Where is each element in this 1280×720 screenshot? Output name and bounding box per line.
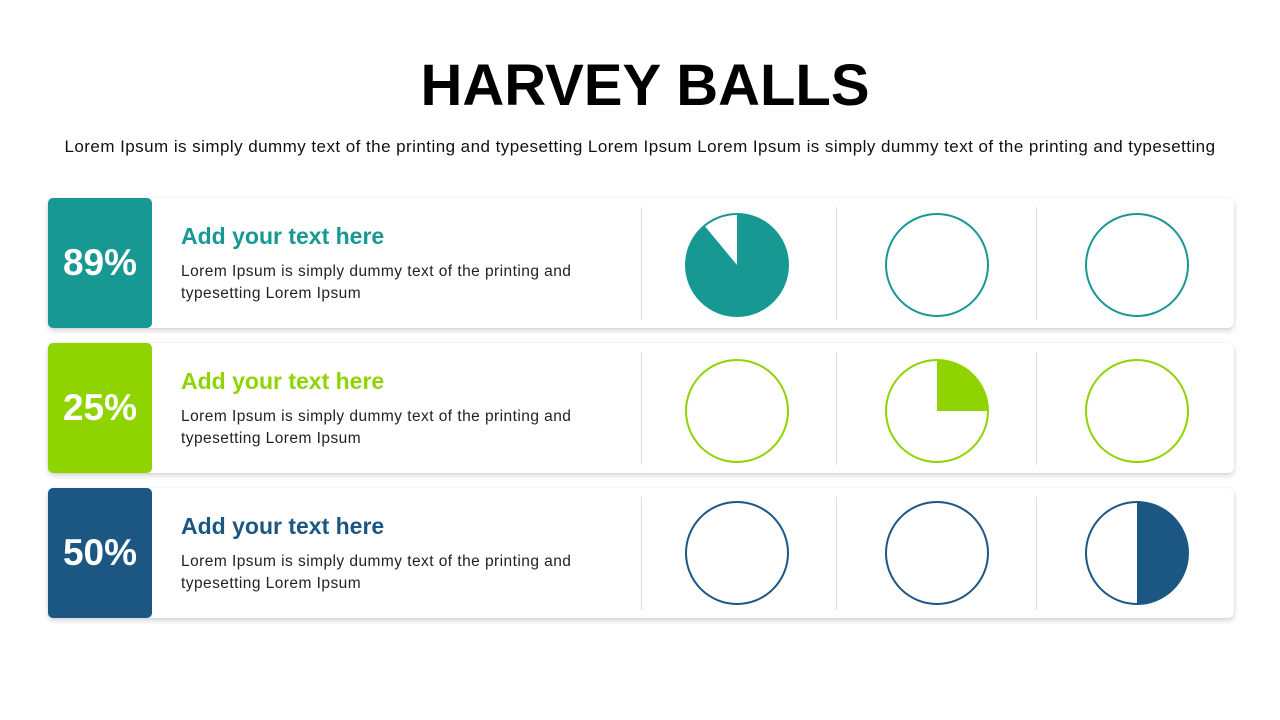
title: HARVEY BALLS [420,53,870,118]
percent box 25% [48,343,152,473]
percent box 89% [48,198,152,328]
ball row3 col1 [686,502,788,604]
row 1: 89% [48,198,1234,328]
ball row1 col1 89% [686,214,788,316]
ball row3 col2 [886,502,988,604]
ball row2 col1 [686,360,788,462]
heading 1: Add your text here [181,223,384,249]
row 2: 25% [48,343,1234,473]
text 3: Lorem Ipsum is simply dummy text of the printing and typesetting Lorem Ipsum [181,553,571,592]
heading 2: Add your text here [181,368,384,394]
percent box 50%: 50% [63,532,137,573]
ball row2 col2 25% [886,360,988,462]
ball row3 col3 50% [1086,502,1188,604]
ball row2 col3 [1086,360,1188,462]
ball row1 col3 [1086,214,1188,316]
row 3: 50% [48,488,1234,618]
text 2: Lorem Ipsum is simply dummy text of the printing and typesetting Lorem Ipsum [181,408,571,447]
heading 3: Add your text here [181,513,384,539]
percent box 25%: 25% [63,387,137,428]
percent box 50% [48,488,152,618]
text 1: Lorem Ipsum is simply dummy text of the printing and typesetting Lorem Ipsum [181,263,571,302]
ball row1 col2 [886,214,988,316]
percent box 89%: 89% [63,242,137,283]
subtitle: Lorem Ipsum is simply dummy text of the printing and typesetting Lorem Ipsum Lorem Ipsum is simply dummy text of the printing and typesetting [64,137,1215,156]
